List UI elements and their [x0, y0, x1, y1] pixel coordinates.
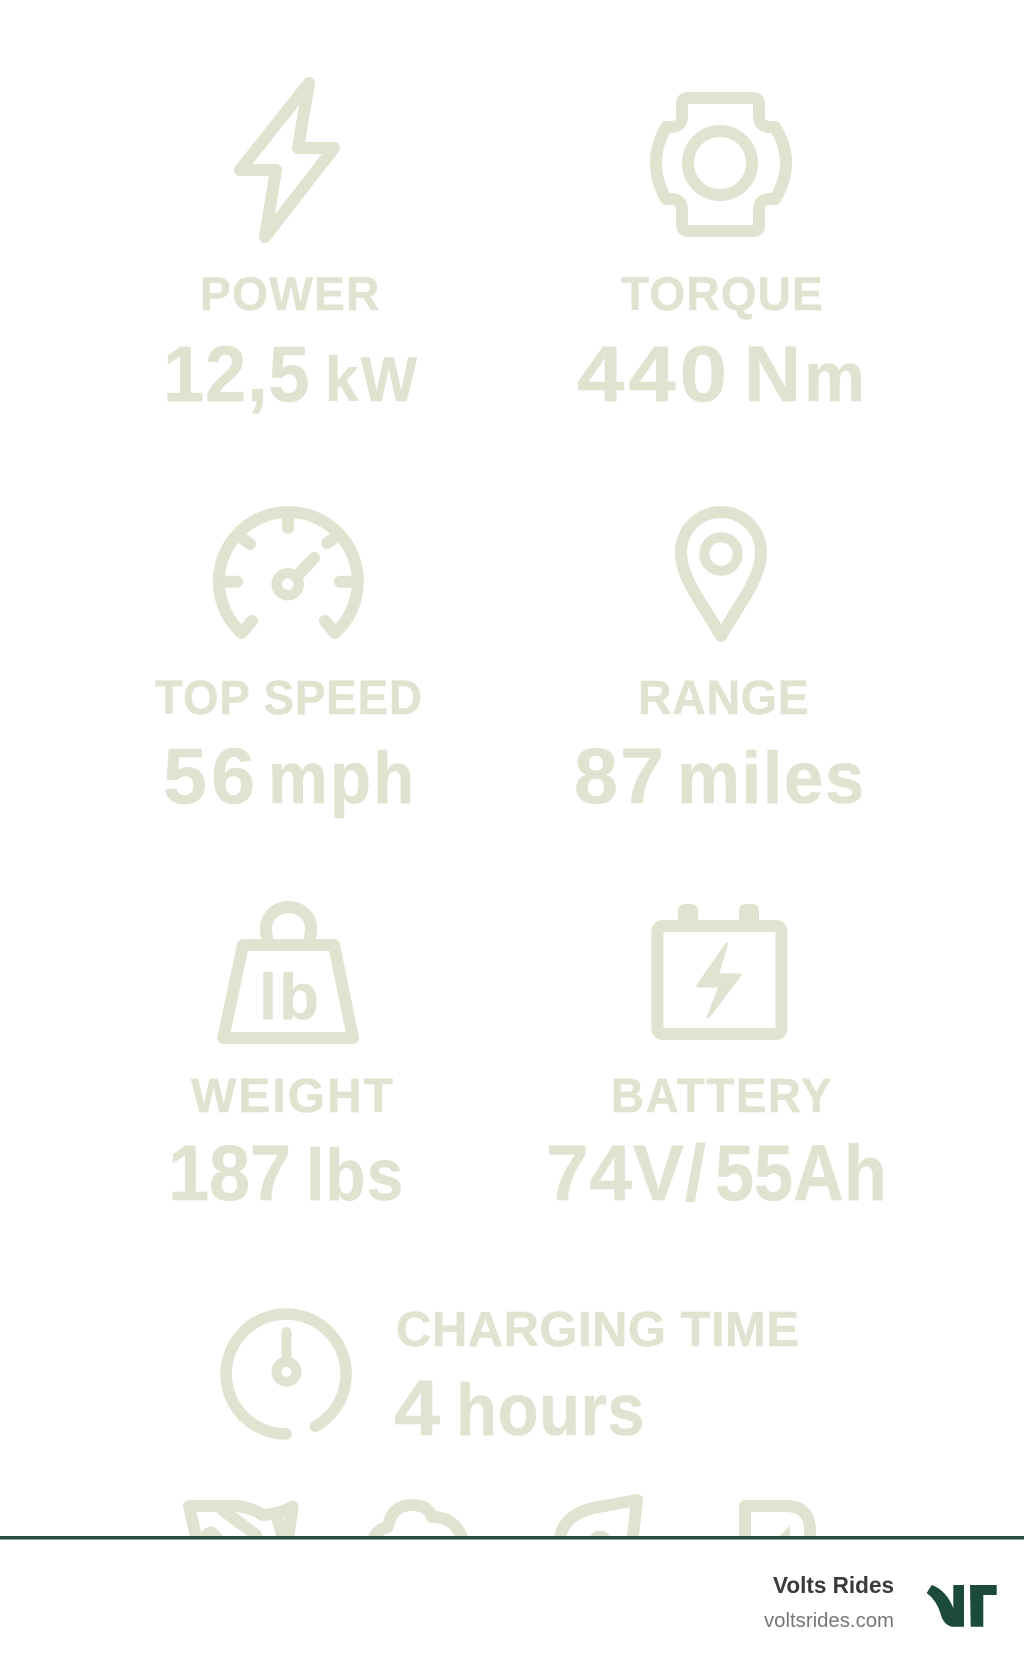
unit: m: m [804, 338, 865, 416]
value: charging time: 4 [394, 1363, 440, 1452]
panel: power [163, 83, 417, 419]
brand name: Volts Rides [773, 1572, 894, 1598]
icon: charging gauge [226, 1314, 346, 1434]
icon: cloud tree [372, 1505, 464, 1545]
icon: leaves [189, 1506, 293, 1545]
panel: charging time [226, 1303, 799, 1452]
value: capacity: 55Ah [715, 1128, 887, 1217]
panel: top speed [155, 512, 422, 820]
brand url: voltsrides.com [764, 1609, 894, 1632]
icon: engine block [656, 98, 786, 231]
icon row: clipped eco icons [189, 1500, 810, 1545]
label: torque: TORQUE [621, 267, 823, 320]
value: power: 12,5 [163, 331, 310, 419]
value: voltage: 74V/ [546, 1130, 706, 1217]
icon: map pin [681, 512, 761, 636]
unit: miles: miles [677, 738, 864, 819]
label: weight: WEIGHT [191, 1070, 393, 1123]
label: top speed: TOP SPEED [155, 671, 422, 724]
value: torque: 440 [577, 331, 727, 418]
icon: kettle weight [223, 907, 353, 1038]
panel: range [574, 512, 864, 820]
icon: speedometer [219, 512, 358, 633]
panel: weight [168, 907, 403, 1218]
footer panel [0, 1536, 1024, 1666]
value: top speed: 56 [163, 731, 255, 820]
logo [927, 1585, 997, 1627]
unit: hours: hours [456, 1369, 645, 1451]
unit: lbs: lbs [306, 1134, 403, 1216]
label: battery: BATTERY [611, 1069, 831, 1122]
label: charging time: CHARGING TIME [396, 1303, 799, 1357]
icon: kettle weight: lb [259, 960, 319, 1033]
value: range: 87 [574, 731, 664, 820]
unit: kW: kW [325, 345, 417, 415]
label: range: RANGE [638, 671, 809, 725]
panel: torque [577, 98, 865, 418]
icon: battery [658, 904, 782, 1034]
unit: mph: mph [268, 737, 414, 819]
icon: lightning bolt [240, 83, 334, 237]
unit: N: N [744, 329, 801, 418]
value: weight: 187 [168, 1130, 291, 1218]
icon: small triangle [770, 1526, 790, 1545]
icon: engine bore [688, 131, 752, 195]
icon: leaf [559, 1500, 637, 1545]
panel: battery [546, 904, 887, 1217]
label: power: POWER [200, 267, 379, 320]
footer rule [0, 1536, 1024, 1540]
icon: rounded square [745, 1506, 810, 1545]
